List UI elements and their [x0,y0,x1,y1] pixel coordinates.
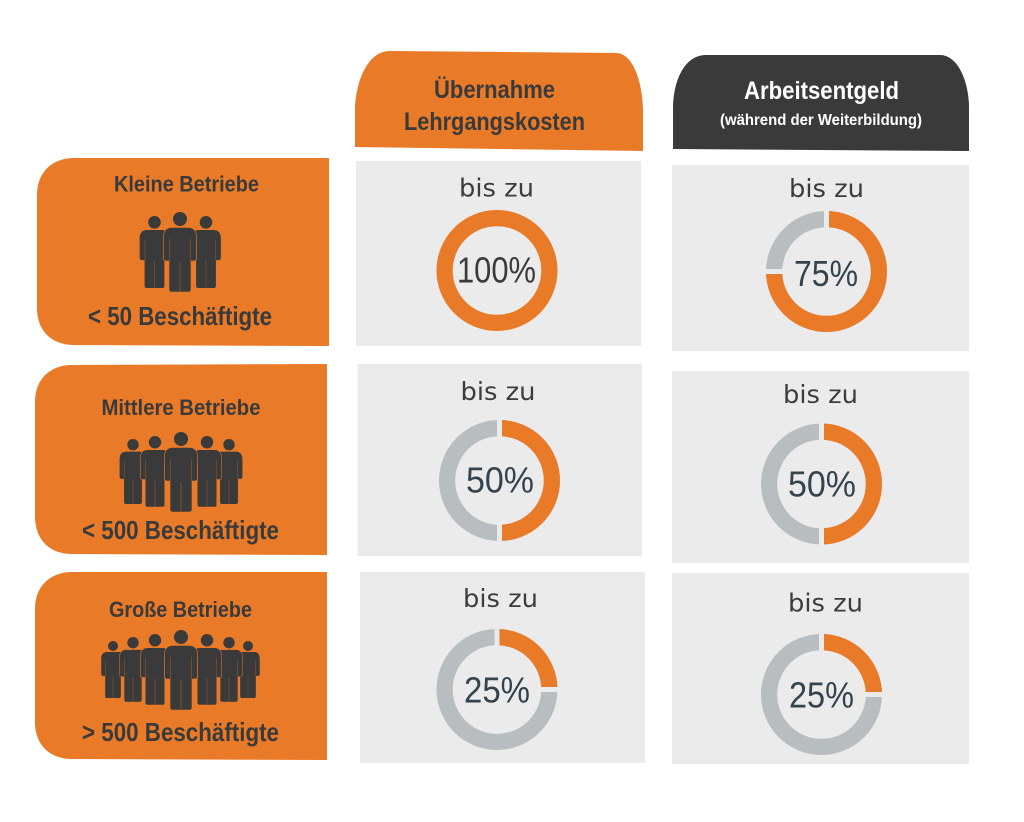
heading: Große Betriebe: Große Betriebe [109,597,252,622]
header: Arbeitsentgeld [673,55,969,151]
donut chart: 25% [445,626,560,742]
donut chart: 100% [445,218,549,323]
donut chart: 100%: 100% [457,250,536,290]
panel: Kleine Betriebe [37,158,329,346]
panel: Mittlere Betriebe [35,364,327,555]
label: more than 500 employees: > 500 Beschäftigte [82,717,279,747]
icon: three people [140,212,221,292]
panel: medium firms, wages 50% [672,371,969,563]
header: Übernahme Lehrgangskosten: Lehrgangskosten [404,108,585,136]
panel: large firms, wages 25%: bis zu [788,588,863,618]
icon: five people [120,432,242,512]
donut chart: 50%: 50% [788,464,856,504]
header: Arbeitsentgeld: Arbeitsentgeld [744,77,899,105]
panel: large firms, course costs 25% [360,572,645,763]
heading: Mittlere Betriebe: Mittlere Betriebe [102,395,260,420]
panel: medium firms, wages 50%: bis zu [783,380,858,409]
panel: small firms, wages 75%: bis zu [789,174,864,203]
panel: large firms, wages 25% [672,573,969,764]
heading: Kleine Betriebe: Kleine Betriebe [114,172,259,196]
donut chart: 50% [769,420,874,548]
donut chart: 25% [769,631,885,747]
donut chart: 75% [763,208,879,324]
panel: small firms, course costs 100%: bis zu [459,174,534,202]
panel: small firms, wages 75% [672,165,969,351]
icon: seven people [101,630,260,710]
donut chart: 75%: 75% [794,253,858,294]
donut chart: 25%: 25% [789,675,854,716]
header: Arbeitsentgeld: (während der Weiterbildung) [720,112,922,129]
panel: Große Betriebe [35,572,327,760]
panel: medium firms, course costs 50% [358,364,642,556]
panel: medium firms, course costs 50%: bis zu [460,377,536,406]
donut chart: 50% [447,417,552,544]
panel: large firms, course costs 25%: bis zu [463,584,538,613]
panel: small firms, course costs 100% [356,161,641,346]
donut chart: 50%: 50% [466,460,534,501]
header: Übernahme Lehrgangskosten [355,51,643,151]
label: fewer than 500 employees: < 500 Beschäftigte [82,515,279,545]
donut chart: 25%: 25% [464,670,530,711]
label: fewer than 50 employees: < 50 Beschäftigte [88,301,272,331]
header: Übernahme Lehrgangskosten: Übernahme [434,75,555,104]
